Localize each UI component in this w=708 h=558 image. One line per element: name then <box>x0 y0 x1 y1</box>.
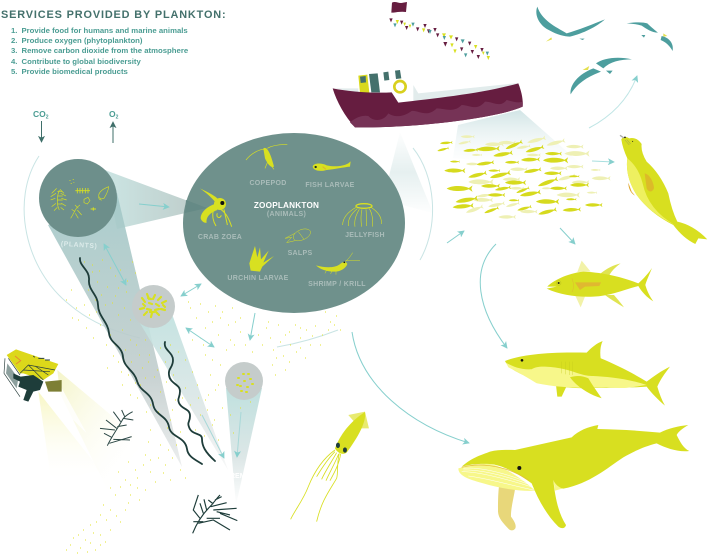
icon: jellyfish <box>343 204 382 227</box>
label: fish larvae: FISH LARVAE <box>305 182 355 189</box>
label: copepod: COPEPOD <box>249 180 287 187</box>
ship <box>333 70 523 127</box>
deck shading <box>413 83 518 101</box>
label: urchin larvae: URCHIN LARVAE <box>227 275 289 282</box>
CO2 label and arrow: CO <box>33 109 46 119</box>
services list: Provide food for humans and marine animals <box>22 26 188 35</box>
cone: phytoplankton sinking <box>48 193 182 467</box>
arrow: ocean to fish <box>447 231 464 243</box>
arrow: zooplankton to whale <box>352 332 469 443</box>
whale <box>458 425 689 530</box>
services list: Provide biomedical products <box>22 67 128 76</box>
arrow: zooplankton to detritus <box>250 313 255 340</box>
cone: bacteria sinking <box>138 314 228 470</box>
services list: Contribute to global biodiversity <box>22 57 141 66</box>
services list: 4. <box>11 57 17 66</box>
services list: Produce oxygen (phytoplankton) <box>22 36 143 45</box>
icon: star cell <box>71 205 82 218</box>
seal <box>620 135 707 244</box>
icon: diatom spiny <box>51 188 67 211</box>
hull <box>333 83 523 127</box>
cone: phytoplankton to zooplankton <box>105 170 207 229</box>
label: salps: SALPS <box>288 250 312 257</box>
arrow: fish to seal <box>592 161 614 162</box>
funnels <box>358 75 369 93</box>
icon: chain diatom <box>75 188 90 193</box>
fish school <box>437 135 611 219</box>
arrow: phytoplankton to zooplankton <box>139 204 169 207</box>
circle: detritus <box>225 362 263 400</box>
bunting <box>389 18 490 60</box>
O2 label and arrow: O <box>109 109 116 119</box>
CO2 label and arrow: 2 <box>46 114 49 120</box>
label: jellyfish: JELLYFISH <box>345 232 385 239</box>
O2 label and arrow: 2 <box>116 114 119 120</box>
ellipse: zooplankton <box>183 133 405 313</box>
kelp: upper seaweed <box>100 410 133 446</box>
arrow: bacteria and zooplankton <box>181 284 201 296</box>
label: zooplankton: ZOOPLANKTON <box>254 201 319 210</box>
flag <box>391 2 407 13</box>
title: SERVICES PROVIDED BY PLANKTON: <box>1 9 226 21</box>
arrow: detritus sinking <box>237 412 241 457</box>
kelp: lower seaweed <box>193 495 237 533</box>
bird: upper left <box>536 7 605 42</box>
icon: fish larvae <box>313 161 351 171</box>
icon: urchin larvae <box>249 246 274 272</box>
label: crab zoea: CRAB ZOEA <box>198 234 242 241</box>
services list: 3. <box>11 46 17 55</box>
circle: phytoplankton <box>39 159 117 237</box>
tuna <box>547 261 653 307</box>
shark <box>505 341 670 406</box>
icon: salps <box>285 229 311 243</box>
label: plants: (PLANTS) <box>61 241 98 250</box>
CO2 label and arrow <box>33 109 49 142</box>
flag and bunting <box>389 2 490 60</box>
icon: copepod <box>246 145 287 169</box>
overlap of cone on ellipse <box>185 200 207 213</box>
bird: upper right <box>627 22 673 51</box>
arrow: fish to shark <box>480 244 507 348</box>
icon: crab zoea <box>200 188 232 227</box>
bird: lower <box>571 58 632 94</box>
services list: 1. <box>11 26 17 35</box>
arrow: fish to tuna <box>560 228 575 244</box>
sinking wave: marine snow 1 <box>80 258 202 464</box>
icon: horned dinoflagellate <box>99 187 109 201</box>
cone: detritus sinking <box>226 388 262 505</box>
plankton particles <box>66 260 221 553</box>
circle: bacteria <box>132 285 175 328</box>
label: shrimp krill: SHRIMP / KRILL <box>308 281 366 288</box>
label: animals: (ANIMALS) <box>267 211 306 218</box>
arrow: snow sinking <box>202 415 224 458</box>
services list: 5. <box>11 67 17 76</box>
faint label: REM <box>230 473 246 480</box>
squid <box>291 412 369 522</box>
ROV light beams <box>38 370 147 492</box>
icon: shrimp krill <box>316 253 360 275</box>
water cycle arc <box>24 148 433 347</box>
life ring <box>394 81 406 92</box>
O2 label and arrow <box>109 109 119 143</box>
arrow: phytoplankton and bacteria <box>104 244 126 285</box>
icon: ring cell <box>84 197 90 204</box>
flipper: far <box>498 483 516 530</box>
services list: 2. <box>11 36 17 45</box>
services list <box>11 26 189 76</box>
arrow: fish to birds <box>589 76 637 128</box>
arrow: bacteria and detritus <box>186 328 214 347</box>
ship light beams <box>383 110 590 213</box>
services list: Remove carbon dioxide from the atmosphere <box>22 46 189 55</box>
sinking wave: marine snow 2 <box>165 342 215 461</box>
ROV submersible <box>4 349 62 402</box>
